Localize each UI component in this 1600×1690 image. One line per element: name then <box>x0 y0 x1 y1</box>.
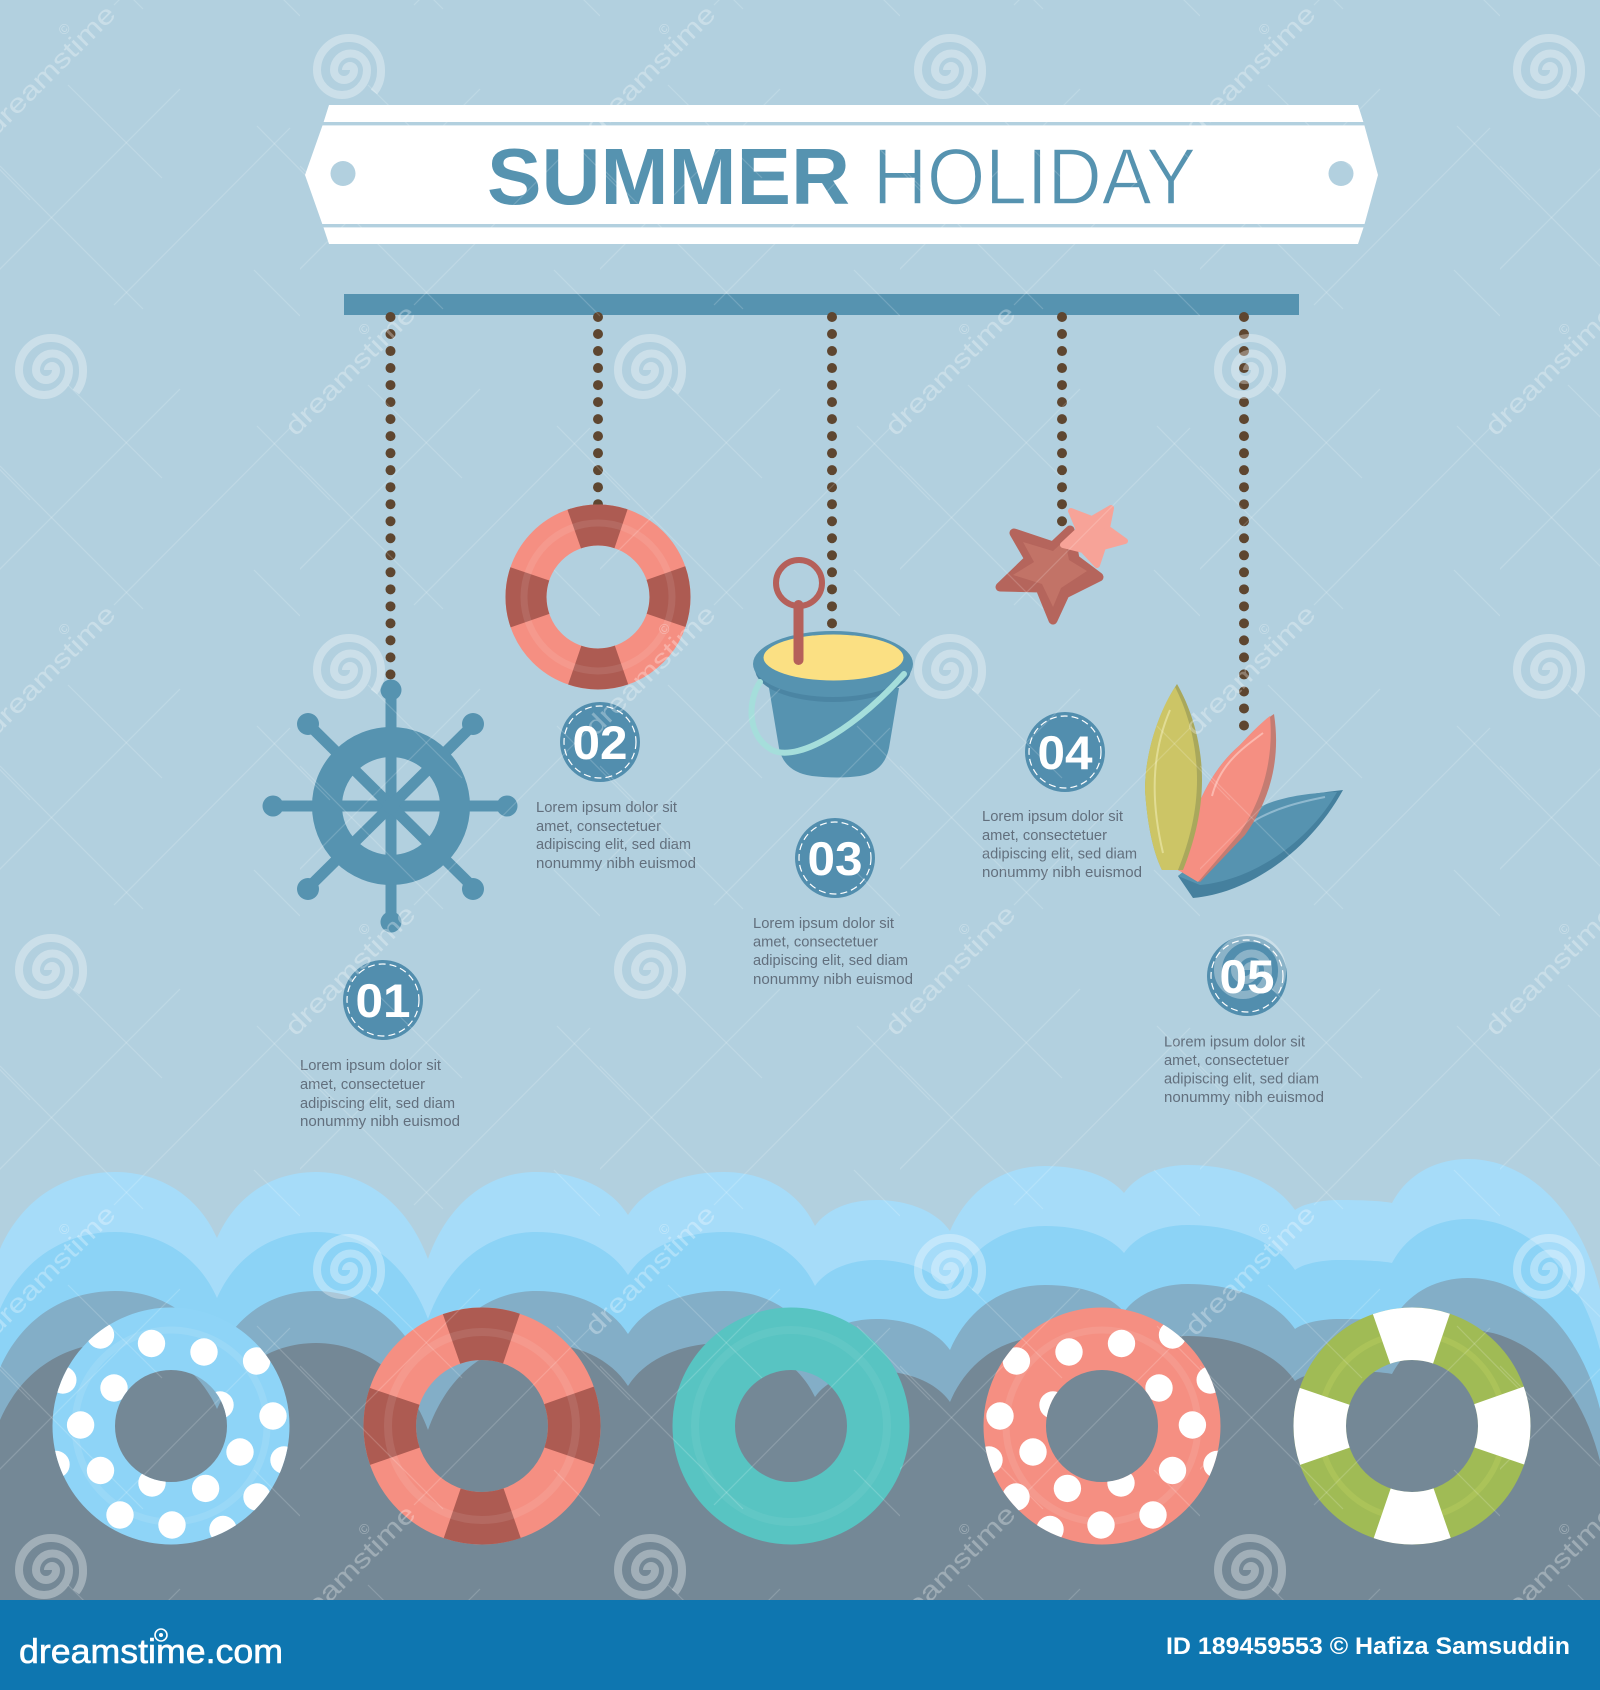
text block 05: Lorem ipsum dolor sit <box>1164 1034 1306 1050</box>
watermark overlay: © <box>655 619 674 638</box>
watermark overlay: © <box>355 319 374 338</box>
text block 03: adipiscing elit, sed diam <box>753 952 908 969</box>
hanging bar <box>344 294 1299 315</box>
icon: lifebuoy <box>524 523 672 671</box>
text block 01: nonummy nibh euismod <box>300 1113 460 1130</box>
badge 05: 05 <box>1220 950 1274 1003</box>
text block 05: amet, consectetuer <box>1164 1052 1289 1069</box>
swim ring: salmon polka dots <box>975 1321 1231 1543</box>
text block 04: adipiscing elit, sed diam <box>982 846 1137 862</box>
title text <box>487 132 1196 221</box>
badge 02 <box>560 702 640 782</box>
item 05: surfboards <box>1145 684 1343 1106</box>
watermark overlay: © <box>1255 1219 1274 1238</box>
text block 05 <box>1164 1034 1324 1106</box>
watermark overlay: dreamstime <box>1179 599 1321 741</box>
watermark overlay: © <box>1555 1519 1574 1538</box>
chains <box>390 317 1244 727</box>
text block 01 <box>300 1057 460 1130</box>
sea waves <box>0 1159 1600 1600</box>
text block 04 <box>982 808 1142 881</box>
title text: SUMMER <box>487 132 850 221</box>
swim ring: green and white stripes <box>1320 1334 1504 1518</box>
text block 02: amet, consectetuer <box>536 818 661 835</box>
badge 01: 01 <box>356 974 410 1027</box>
item 01: ship wheel <box>262 680 518 1130</box>
icon: sand bucket <box>751 560 913 778</box>
watermark overlay: © <box>1555 319 1574 338</box>
footer bar <box>0 1600 1600 1690</box>
title banner <box>305 105 1378 244</box>
text block 04: amet, consectetuer <box>982 827 1107 844</box>
watermark overlay: © <box>655 19 674 38</box>
watermark overlay: © <box>1255 19 1274 38</box>
watermark overlay: dreamstime <box>879 899 1021 1041</box>
watermark overlay: © <box>655 1219 674 1238</box>
text block 03: amet, consectetuer <box>753 934 878 950</box>
watermark overlay: dreamstime <box>579 0 721 141</box>
item 02: lifebuoy <box>524 523 696 872</box>
swim ring: blue polka dots <box>42 1321 298 1543</box>
watermark overlay: © <box>55 1219 74 1238</box>
icon: ship wheel <box>262 680 518 932</box>
watermark overlay: © <box>55 619 74 638</box>
watermark overlay: © <box>355 1519 374 1538</box>
watermark overlay: dreamstime <box>279 299 421 441</box>
watermark overlay: dreamstime <box>579 599 721 741</box>
watermark overlay: dreamstime <box>1179 1199 1321 1341</box>
text block 01: amet, consectetuer <box>300 1076 425 1093</box>
text block 04: nonummy nibh euismod <box>982 864 1142 881</box>
icon: starfish <box>1000 508 1125 620</box>
footer logo: dreamstime.com <box>19 1633 283 1671</box>
badge 03 <box>795 818 875 898</box>
watermark overlay: © <box>955 919 974 938</box>
badge 03: 03 <box>808 832 862 885</box>
title text: HOLIDAY <box>873 132 1196 221</box>
footer credit: ID 189459553 © Hafiza Samsuddin <box>1166 1633 1570 1660</box>
text block 03: Lorem ipsum dolor sit <box>753 915 895 932</box>
watermark overlay: dreamstime <box>279 899 421 1041</box>
text block 02: adipiscing elit, sed diam <box>536 836 691 853</box>
badge 04: 04 <box>1038 726 1092 779</box>
watermark overlay: © <box>1555 919 1574 938</box>
badge 01 <box>343 960 423 1040</box>
text block 02 <box>536 799 696 872</box>
watermark overlay: dreamstime <box>1179 0 1321 141</box>
item 03: bucket <box>751 560 913 988</box>
text block 05: adipiscing elit, sed diam <box>1164 1070 1319 1088</box>
watermark overlay: dreamstime <box>1479 299 1600 441</box>
text block 02: nonummy nibh euismod <box>536 855 696 872</box>
text block 03 <box>753 915 913 988</box>
watermark overlay: © <box>355 919 374 938</box>
icon: surfboards <box>1145 684 1343 898</box>
watermark overlay: dreamstime <box>579 1199 721 1341</box>
text block 05: nonummy nibh euismod <box>1164 1089 1324 1106</box>
badge 02: 02 <box>572 716 628 769</box>
text block 02: Lorem ipsum dolor sit <box>536 799 678 816</box>
watermark overlay: © <box>55 19 74 38</box>
watermark overlay: dreamstime <box>1479 1499 1600 1641</box>
watermark overlay: © <box>1255 619 1274 638</box>
watermark overlay: dreamstime <box>879 299 1021 441</box>
watermark overlay: © <box>955 319 974 338</box>
watermark overlay: © <box>955 1519 974 1538</box>
watermark overlay: dreamstime <box>279 1499 421 1641</box>
swim ring: teal <box>695 1330 887 1522</box>
text block 01: Lorem ipsum dolor sit <box>300 1057 442 1074</box>
item 04: starfish <box>982 508 1142 881</box>
text block 04: Lorem ipsum dolor sit <box>982 808 1124 825</box>
text block 01: adipiscing elit, sed diam <box>300 1095 455 1112</box>
text block 03: nonummy nibh euismod <box>753 971 913 988</box>
badge 05 <box>1207 936 1287 1016</box>
watermark overlay: dreamstime <box>879 1499 1021 1641</box>
badge 04 <box>1025 712 1105 792</box>
watermark overlay: dreamstime <box>1479 899 1600 1041</box>
swim ring: salmon and brown stripes <box>388 1332 576 1520</box>
